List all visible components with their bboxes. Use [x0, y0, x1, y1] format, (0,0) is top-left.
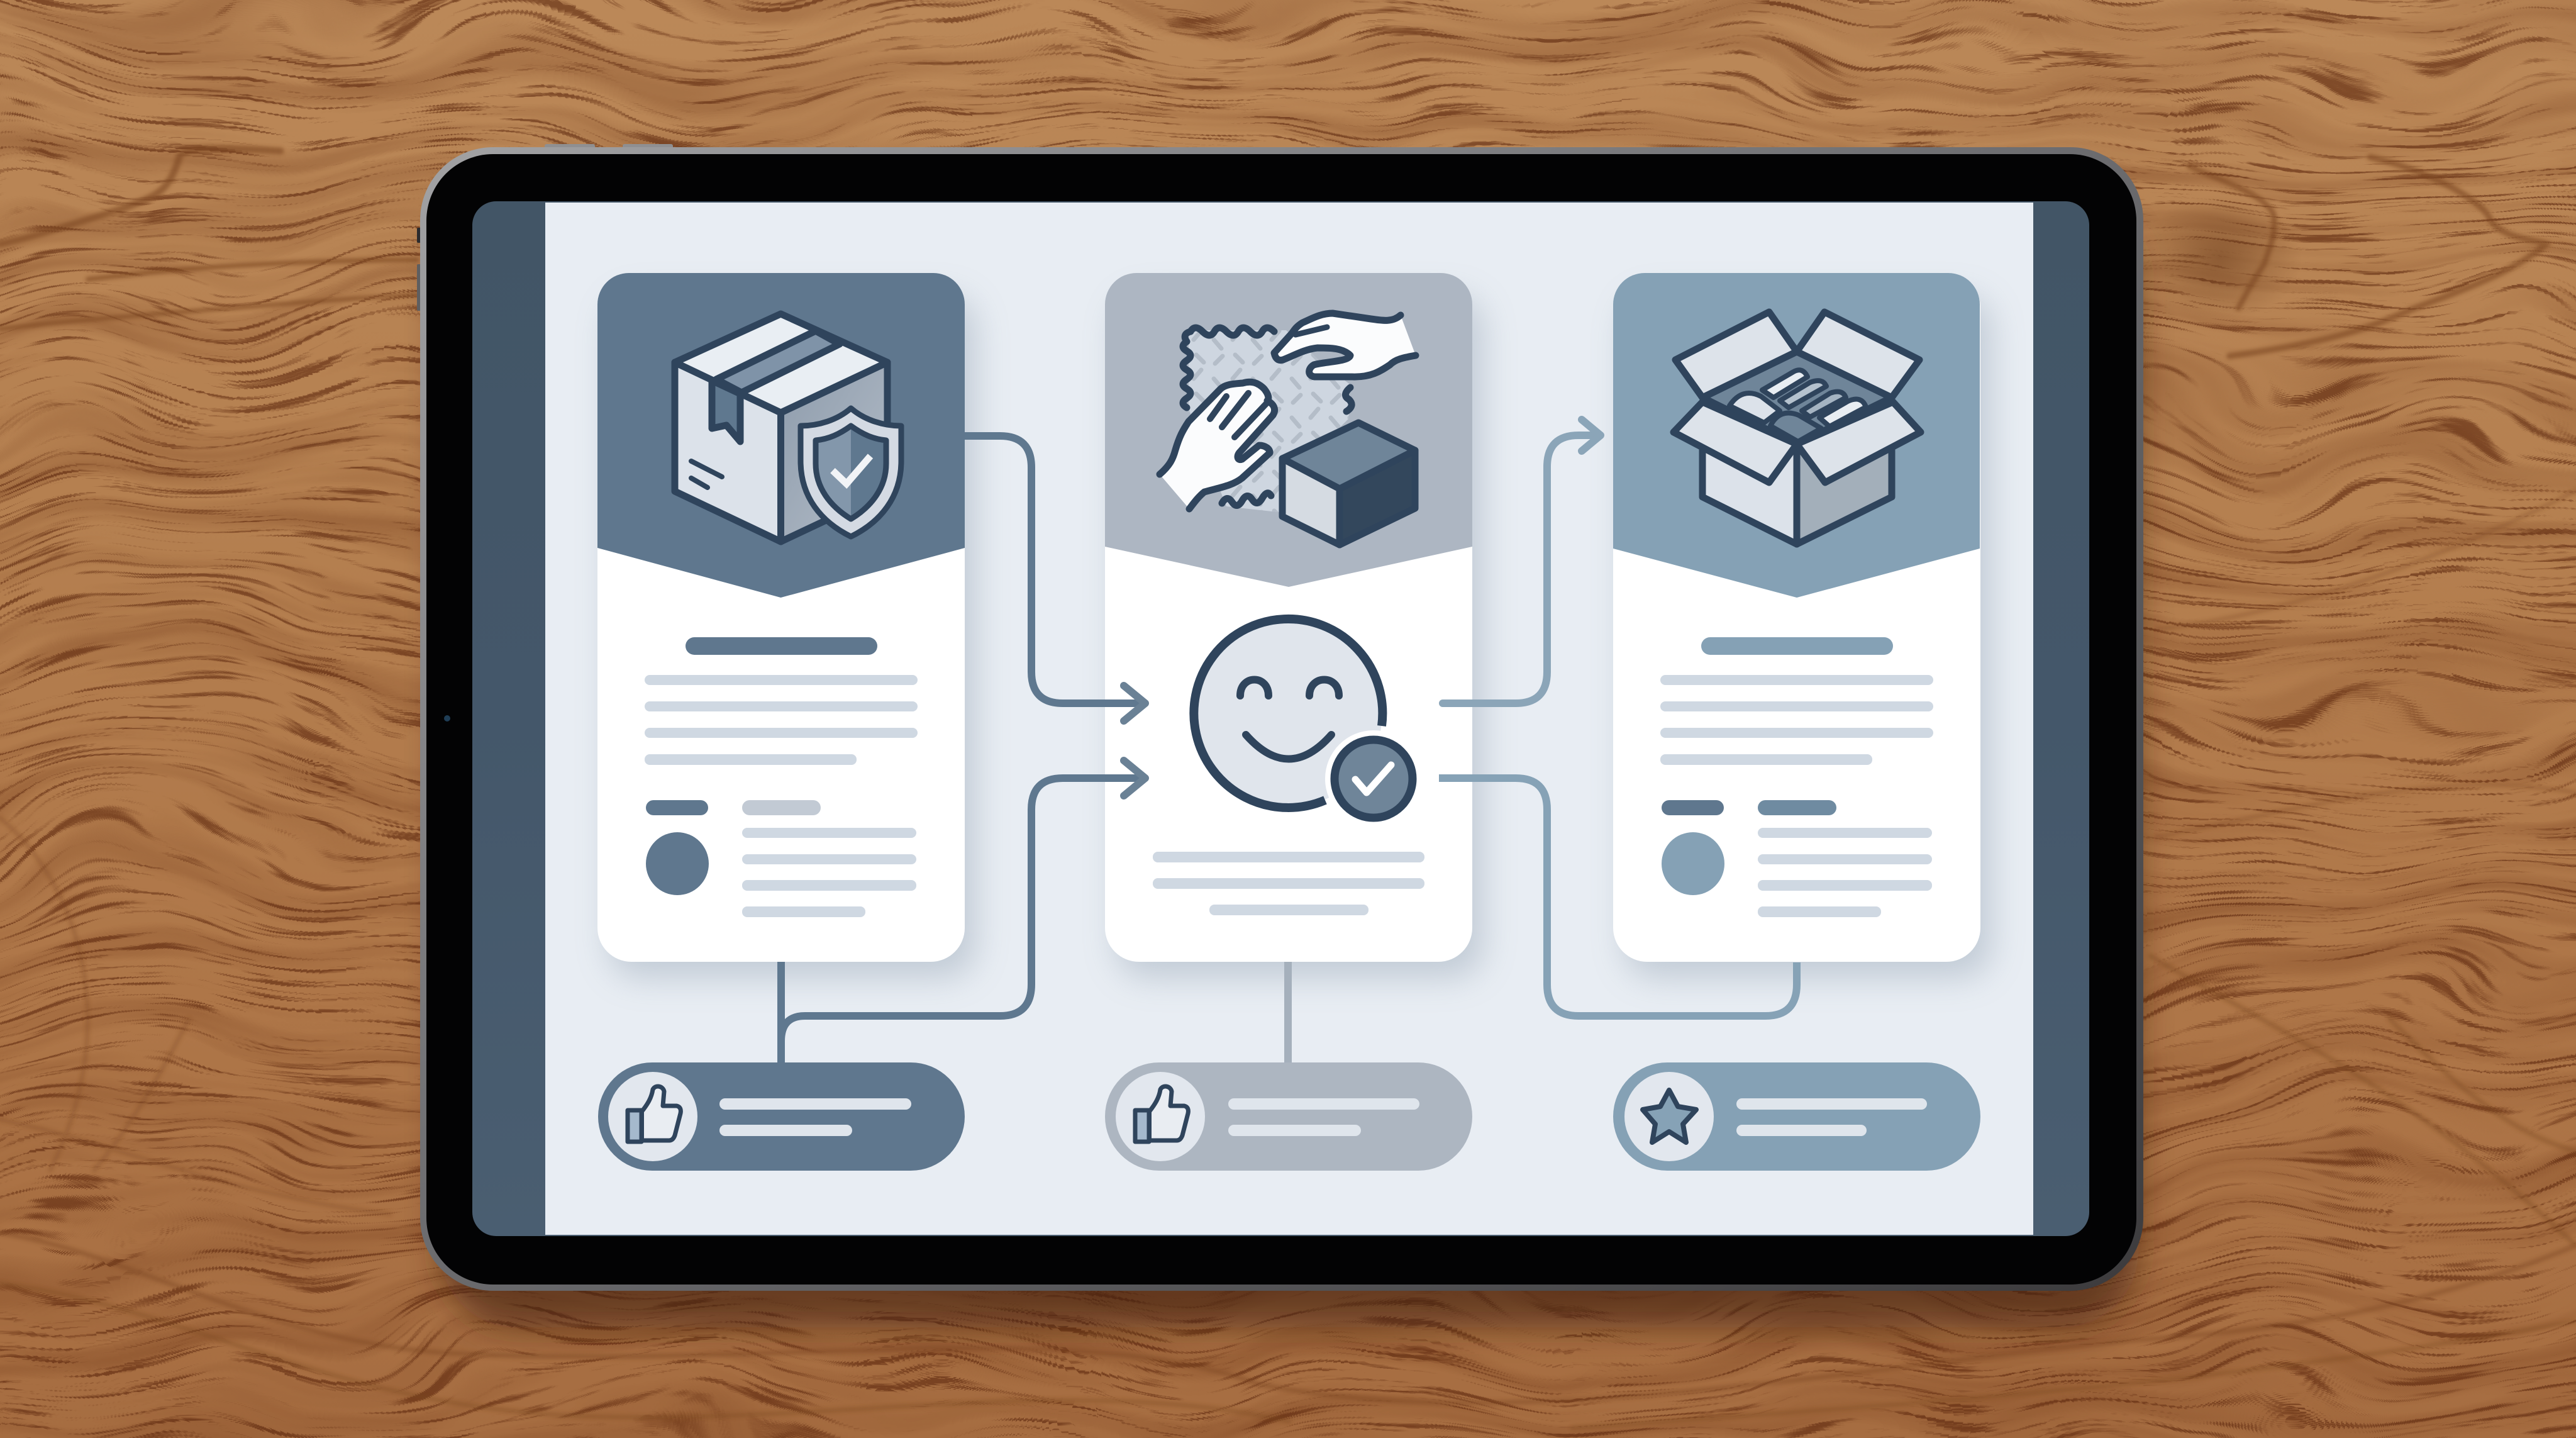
- metal frame: [420, 147, 2143, 1291]
- tablet shadow on desk: [440, 201, 2138, 1327]
- pill 1 text lines: [719, 1098, 911, 1136]
- lower hand: [1160, 382, 1275, 509]
- card 2 text lines: [1153, 852, 1424, 915]
- badge: [1335, 740, 1413, 818]
- connector: centre card to pill: [1284, 962, 1292, 1064]
- pill 3: [1613, 1062, 1980, 1171]
- connector: centre to card 3 bottom: [1439, 778, 1797, 1016]
- shield inner right: [851, 426, 886, 519]
- card 1 detail lines: [742, 828, 916, 917]
- card 1 bullet: [646, 832, 709, 895]
- pill 3 text lines: [1736, 1098, 1927, 1136]
- icon: open box with contents: [1674, 312, 1921, 544]
- box contents: [1729, 370, 1866, 442]
- front camera: [444, 715, 450, 722]
- icon: thumbs up: [608, 1072, 697, 1161]
- badge check: [1355, 765, 1391, 793]
- screen side bars: [472, 201, 2089, 1236]
- card 2 header: [1105, 273, 1472, 587]
- pill 1: [598, 1062, 965, 1171]
- card 3 header: [1613, 273, 1980, 598]
- shield inner outline: [816, 426, 886, 519]
- hardware buttons: [417, 144, 673, 311]
- shield outer: [801, 408, 901, 537]
- tablet device: [417, 144, 2143, 1291]
- top hand: [1274, 313, 1416, 377]
- icon: thumbs up: [1116, 1072, 1205, 1161]
- arrow: card 1 to centre upper: [965, 436, 1145, 721]
- pill 2 text lines: [1228, 1098, 1419, 1136]
- panel: card 3 unboxing: [1613, 273, 1980, 962]
- icon: smiley with check: [1194, 618, 1422, 827]
- screen main area: [545, 203, 2033, 1235]
- shield check: [833, 456, 870, 484]
- pill 2: [1105, 1062, 1472, 1171]
- card shadows: [609, 296, 1992, 978]
- arrow: card 1 pill to centre lower: [781, 761, 1145, 1064]
- card 3 tags: [1662, 800, 1836, 815]
- black bezel: [426, 154, 2136, 1285]
- icon: star: [1624, 1072, 1714, 1161]
- card 1 header: [597, 273, 965, 598]
- panel: card 1 protection: [597, 273, 965, 962]
- icon: box with shield: [675, 314, 901, 542]
- arrow: centre to card 3: [1443, 420, 1601, 703]
- card 3 detail lines: [1758, 828, 1932, 917]
- box interior: [1702, 352, 1892, 444]
- card 3 title bar: [1701, 637, 1893, 655]
- panel: card 2 handling: [1105, 273, 1472, 962]
- small cube: [1282, 423, 1415, 545]
- bubble wrap edges: [1183, 328, 1352, 506]
- flaps: [1675, 312, 1797, 398]
- icon: hands wrapping box: [1160, 313, 1416, 545]
- card 1 text lines: [645, 675, 918, 765]
- card 3 text lines: [1660, 675, 1933, 765]
- card 3 bullet: [1662, 832, 1724, 895]
- card 1 tags: [646, 800, 821, 815]
- card 1 title bar: [686, 637, 877, 655]
- shield inner left: [816, 426, 851, 519]
- bubble wrap sheet: [1189, 330, 1349, 513]
